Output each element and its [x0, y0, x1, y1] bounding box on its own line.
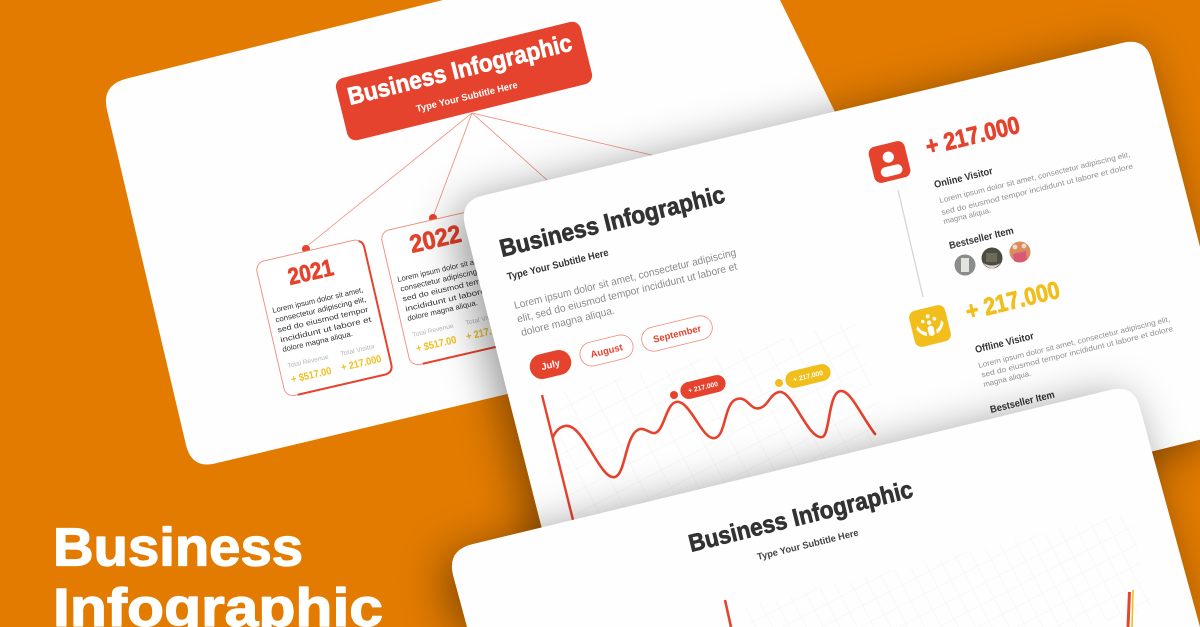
icon: person	[867, 140, 912, 184]
panel: slide 2 line chart and visitors	[464, 42, 1200, 600]
stat: online visitor: + 217.000	[923, 112, 1023, 161]
card: 2022: consectetur adipiscing elit,	[399, 264, 492, 293]
stat: online visitor: Bestseller Item	[948, 226, 1015, 252]
stat: offline visitor: magna aliqua.	[982, 369, 1032, 389]
title banner	[334, 20, 594, 142]
card: 2021: incididunt ut labore et	[279, 315, 373, 344]
subtitle: Type Your Subtitle Here	[506, 248, 610, 283]
heading: Business Infographic	[497, 182, 728, 263]
card: 2022: dolore magna aliqua.	[406, 298, 479, 323]
stat: offline visitor: sed do eiusmod tempor incididunt ut labore et dolore	[980, 324, 1174, 379]
tab: July	[527, 347, 574, 382]
chart axis and bars	[725, 590, 1133, 627]
slide 1 background	[106, 0, 835, 465]
card: 2022: Total Visitor	[465, 312, 501, 327]
stat: online visitor: Lorem ipsum dolor sit amet, consectetur adipiscing elit,	[938, 150, 1131, 205]
card: 2021: consectetur adipiscing elit,	[274, 295, 367, 324]
stat: online visitor	[923, 112, 1134, 252]
card: 2022	[380, 207, 518, 366]
card: 2021: 2021	[285, 254, 336, 290]
subtitle: Type Your Subtitle Here	[756, 528, 860, 563]
line chart: + 217.000	[793, 370, 824, 384]
card: 2022: incididunt ut labore et	[404, 284, 498, 313]
tab: September	[639, 313, 715, 354]
tab: September: September	[652, 323, 703, 346]
card: 2022: sed do eiusmod tempor	[401, 274, 495, 303]
tab: August: August	[590, 342, 625, 361]
card: 2021: + $517.00	[290, 365, 333, 386]
card: 2022: Total Revenue	[412, 323, 455, 339]
stat: offline visitor: + 217.000	[963, 277, 1063, 326]
heading: Business Infographic	[686, 476, 916, 558]
bestseller photos	[954, 242, 1030, 276]
card: 2022: + $517.00	[415, 334, 458, 355]
panel: slide 3 chart	[452, 389, 1200, 627]
card: 2021: sed do eiusmod tempor	[276, 305, 370, 334]
tab: July: July	[540, 358, 562, 373]
tab: August	[577, 332, 636, 369]
main title	[53, 518, 383, 627]
icon: crowd	[908, 304, 952, 348]
card: 2021: Total Visitor	[340, 343, 376, 358]
card: 2021: Total Revenue	[287, 354, 330, 370]
card: 2021: Lorem ipsum dolor sit amet,	[271, 285, 364, 315]
paragraph: elit, sed do eiusmod tempor incididunt ut labore et	[516, 261, 738, 325]
title banner: Type Your Subtitle Here	[415, 80, 519, 115]
paragraph	[513, 247, 738, 339]
paragraph: Lorem ipsum dolor sit amet, consectetur adipiscing	[513, 247, 737, 312]
card: 2022: + 217.000	[465, 322, 508, 343]
paragraph: dolore magna aliqua.	[520, 305, 616, 339]
stat: offline visitor: Bestseller Item	[989, 390, 1056, 416]
stat: online visitor: sed do eiusmod tempor incididunt ut labore et dolore	[940, 162, 1134, 217]
card: 2022: 2022	[407, 220, 464, 259]
stat: online visitor: magna aliqua.	[942, 206, 992, 226]
grid	[745, 512, 1152, 627]
stat: online visitor: Online Visitor	[933, 166, 994, 191]
card: 2021: + 217.000	[340, 353, 383, 374]
main title: Business	[53, 518, 303, 578]
connector lines	[306, 113, 660, 247]
stat: offline visitor: Offline Visitor	[974, 331, 1035, 356]
stat: offline visitor: Lorem ipsum dolor sit amet, consectetur adipiscing elit,	[977, 315, 1171, 370]
line chart	[540, 321, 901, 583]
slide 2 background	[464, 42, 1200, 600]
card: 2021: dolore magna aliqua.	[281, 329, 354, 354]
line chart: + 217.000	[688, 381, 719, 395]
panel: slide 1 timeline	[106, 0, 835, 465]
card: 2021	[255, 238, 393, 397]
stat: offline visitor	[963, 277, 1174, 416]
slide 3 background	[452, 389, 1200, 627]
title banner: Business Infographic	[345, 30, 575, 111]
card: 2022: Lorem ipsum dolor sit amet,	[396, 254, 489, 284]
